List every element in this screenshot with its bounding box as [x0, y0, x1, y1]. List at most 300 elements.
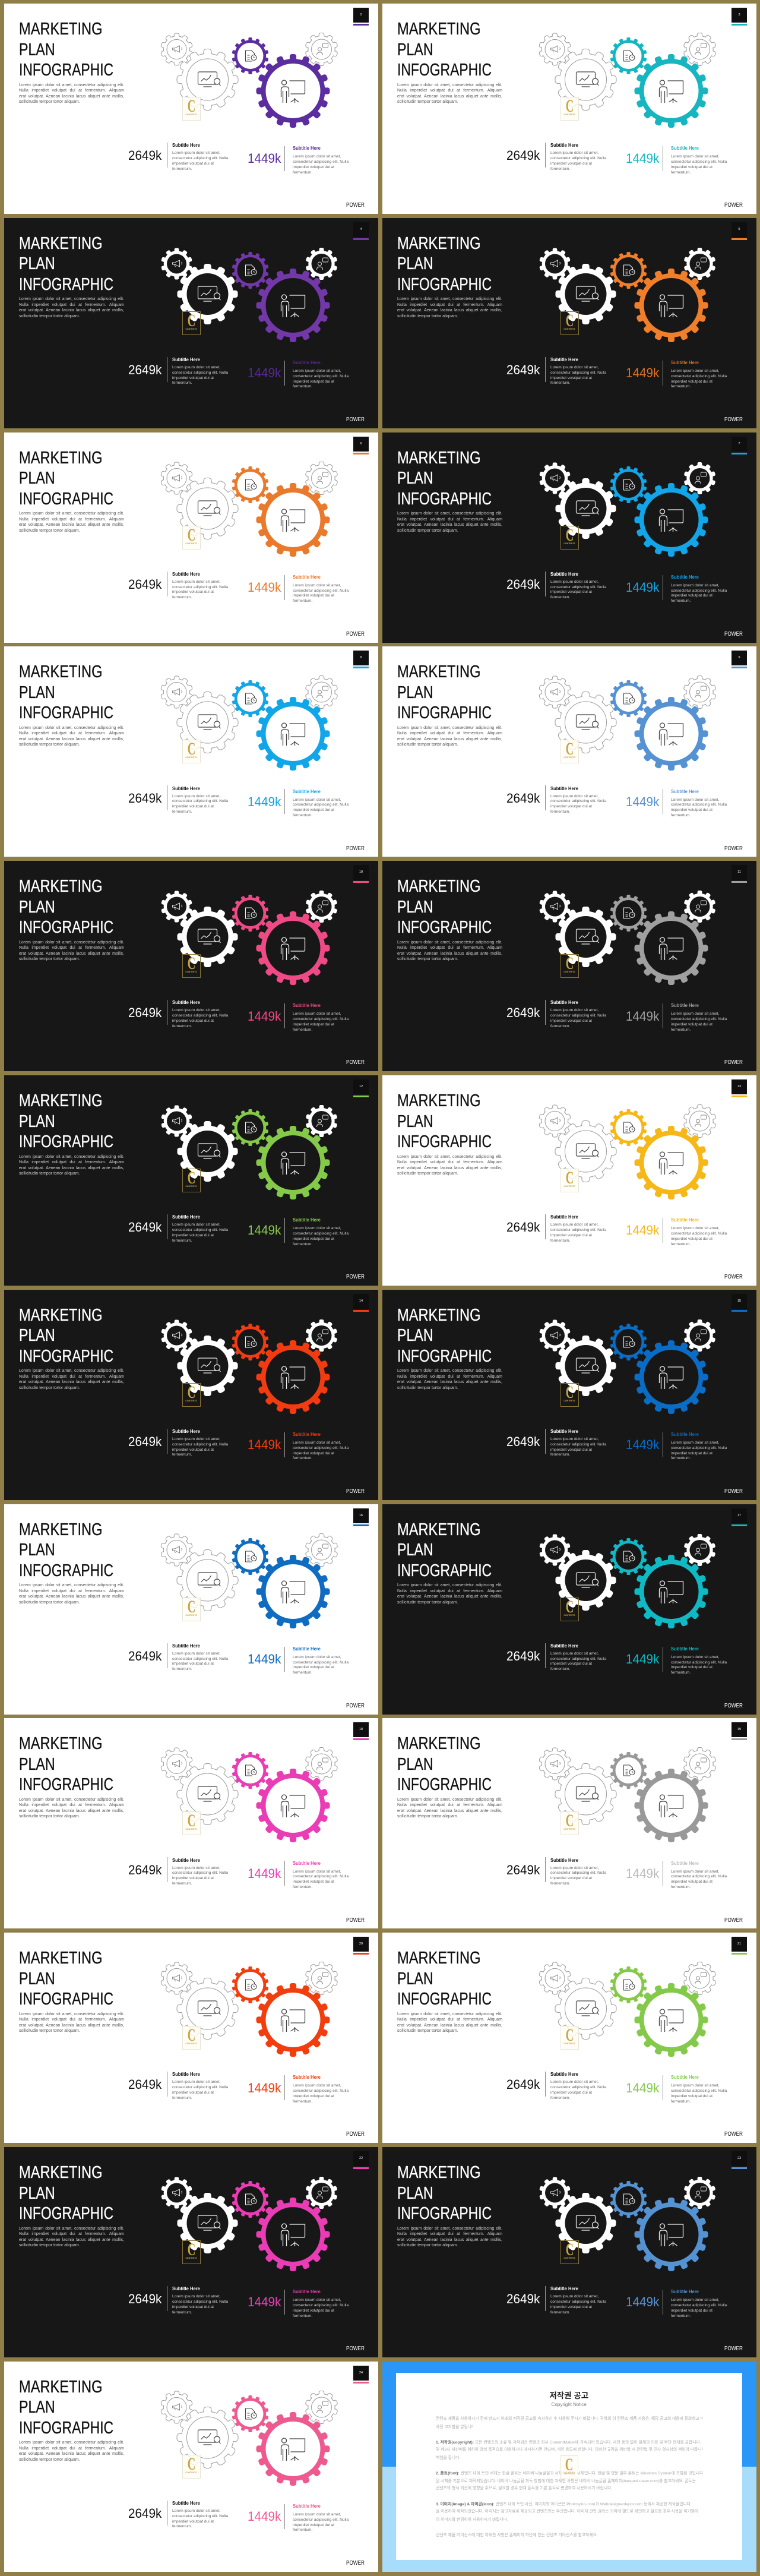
page number: 8 — [360, 656, 362, 659]
logo badge — [182, 1598, 201, 1621]
stat: 1449k: consectetur adipiscing elit. Nulla — [293, 160, 349, 164]
panel: slide 22 — [4, 2147, 378, 2357]
heading: INFOGRAPHIC — [19, 1990, 113, 2009]
stat: 2649k: Subtitle Here — [550, 572, 578, 577]
stat: 1449k: Subtitle Here — [293, 1003, 321, 1008]
stat: 2649k: Lorem ipsum dolor sit amet, — [550, 2294, 598, 2299]
heading: PLAN — [397, 469, 433, 488]
stat: 1449k: Lorem ipsum dolor sit amet, — [293, 583, 341, 588]
gear: chat — [305, 891, 337, 923]
brand: POWER — [724, 845, 743, 852]
body text: Lorem ipsum dolor sit amet, consectetur adipiscing elit. — [397, 940, 502, 945]
page number — [732, 8, 747, 26]
stat: 2649k: imperdiet volutpat dui at — [550, 2305, 592, 2309]
stat: 1449k: fermentum. — [671, 599, 691, 603]
stat: 1449k: Subtitle Here — [671, 789, 699, 794]
stat: 2649k: Lorem ipsum dolor sit amet, — [172, 580, 220, 584]
gears — [382, 1718, 756, 1928]
heading: MARKETING — [397, 20, 481, 39]
gear: document — [232, 1752, 268, 1789]
heading — [19, 1948, 114, 2010]
body text: sollicitudin tempor tortor aliquam. — [19, 743, 80, 747]
heading: INFOGRAPHIC — [19, 1775, 113, 1794]
heading — [397, 234, 492, 294]
stat: 1449k — [626, 360, 727, 389]
page number: 19 — [737, 1728, 741, 1731]
stat: 1449k: Lorem ipsum dolor sit amet, — [293, 798, 341, 802]
stat: 1449k: fermentum. — [671, 2314, 691, 2318]
stat: 2649k: imperdiet volutpat dui at — [172, 804, 214, 809]
stat: 1449k: imperdiet volutpat dui at — [293, 165, 334, 169]
stat: 2649k: Subtitle Here — [550, 1429, 578, 1434]
stat: 2649k: consectetur adipiscing elit. Nulla — [550, 2300, 606, 2304]
body text: Lorem ipsum dolor sit amet, consectetur adipiscing elit. — [19, 2227, 124, 2231]
panel: slide 16 — [4, 1504, 378, 1715]
body text: Nulla imperdiet volutpat dui at fermentum. Aliquam — [19, 89, 124, 93]
stat: 1449k: consectetur adipiscing elit. Nulla — [293, 1874, 349, 1879]
stat: 1449k: imperdiet volutpat dui at — [671, 1880, 712, 1884]
heading: MARKETING — [397, 1520, 481, 1539]
stat: 1449k: imperdiet volutpat dui at — [671, 1451, 712, 1456]
heading: INFOGRAPHIC — [397, 275, 492, 294]
logo badge: C — [565, 2455, 573, 2474]
heading: PLAN — [19, 1326, 55, 1345]
notice section 3 line 3: 이 이미지를 변경하여 사용하시기 바랍니다. — [436, 2518, 508, 2522]
heading — [19, 662, 113, 722]
body text: erat volutpat. Aenean lacinia lacus aliquet ante mollis, — [397, 952, 502, 956]
stat: 2649k — [128, 1429, 241, 1459]
gear: megaphone — [161, 1748, 192, 1780]
gear: document — [610, 1538, 647, 1575]
body text: Nulla imperdiet volutpat dui at fermentum. Aliquam — [397, 946, 502, 950]
stat: 1449k: consectetur adipiscing elit. Nulla — [671, 1232, 727, 1236]
stat: 2649k: Lorem ipsum dolor sit amet, — [550, 794, 598, 798]
heading: MARKETING — [19, 877, 103, 896]
heading: INFOGRAPHIC — [397, 1561, 492, 1580]
body text: sollicitudin tempor tortor aliquam. — [19, 1386, 80, 1390]
gear: document — [610, 1109, 647, 1146]
heading: INFOGRAPHIC — [397, 490, 492, 509]
body text — [19, 726, 124, 747]
notice section 3 line 1: 3. 이미지(image) & 아이콘(icon): 컨텐츠 내에 쓰인 사진, 이미지와 아이콘은 Photosplus.com과 Webdesignerdepot.com 등에서 제공한 저작물입니다. — [436, 2502, 692, 2506]
page number: 6 — [360, 442, 362, 446]
page number: 12 — [359, 1085, 363, 1088]
gear: megaphone — [161, 677, 192, 708]
gear: chat — [305, 1962, 337, 1994]
heading: INFOGRAPHIC — [19, 275, 113, 294]
gear: presenter — [256, 2198, 330, 2271]
stat: 2649k: consectetur adipiscing elit. Nulla — [550, 1014, 606, 1018]
stat: 2649k: fermentum. — [172, 2524, 192, 2528]
gears — [382, 1290, 756, 1500]
body text: sollicitudin tempor tortor aliquam. — [19, 1172, 80, 1176]
gear: megaphone — [161, 2177, 192, 2209]
logo badge: C — [565, 1168, 574, 1188]
body text: erat volutpat. Aenean lacinia lacus aliquet ante mollis, — [397, 2237, 502, 2242]
brand: POWER — [346, 2559, 365, 2566]
stat: 1449k: 1449k — [626, 1223, 659, 1238]
panel: slide 10 — [4, 861, 378, 1071]
heading — [397, 1948, 492, 2010]
stat: 2649k: 2649k — [506, 2077, 540, 2092]
stat: 1449k: Subtitle Here — [293, 2075, 321, 2080]
body text: Lorem ipsum dolor sit amet, consectetur adipiscing elit. — [397, 297, 502, 301]
stat: 2649k: Subtitle Here — [172, 572, 200, 577]
body text: Nulla imperdiet volutpat dui at fermentum. Aliquam — [19, 2018, 124, 2022]
stat: 2649k: Lorem ipsum dolor sit amet, — [172, 2294, 220, 2299]
stat: 2649k: fermentum. — [172, 1882, 192, 1886]
logo badge: C — [187, 2454, 195, 2474]
stat: 2649k: Subtitle Here — [550, 357, 578, 362]
gear: chat — [683, 891, 715, 923]
stat: 2649k: Subtitle Here — [550, 1214, 578, 1220]
body text — [397, 940, 502, 962]
page number — [732, 865, 747, 883]
stat: 1449k: fermentum. — [293, 2100, 312, 2104]
gear: document — [610, 680, 647, 717]
stat: 2649k: Subtitle Here — [550, 1000, 578, 1005]
stat: 1449k: imperdiet volutpat dui at — [293, 2523, 334, 2527]
stat: 2649k: imperdiet volutpat dui at — [172, 2091, 214, 2095]
stat: 2649k: 2649k — [506, 1220, 540, 1235]
heading — [397, 1520, 492, 1581]
heading: MARKETING — [19, 234, 103, 253]
stat: 2649k: imperdiet volutpat dui at — [550, 1876, 592, 1880]
gear: presenter — [634, 483, 708, 557]
body text: Lorem ipsum dolor sit amet, consectetur adipiscing elit. — [19, 1369, 124, 1373]
stat: 2649k: 2649k — [128, 2506, 162, 2521]
stat: 2649k — [506, 1643, 619, 1673]
stat: 1449k: Lorem ipsum dolor sit amet, — [293, 1012, 341, 1016]
stat: 1449k: 1449k — [248, 2509, 281, 2524]
gear: chat — [305, 1319, 337, 1352]
stat: 1449k — [626, 146, 727, 175]
stat: 1449k: imperdiet volutpat dui at — [293, 2309, 334, 2313]
page number: 5 — [738, 228, 740, 231]
stat: 1449k: imperdiet volutpat dui at — [293, 380, 334, 384]
body text — [397, 1797, 502, 1820]
gear: document — [232, 37, 268, 74]
heading: INFOGRAPHIC — [19, 61, 113, 80]
gear: presenter — [256, 54, 330, 128]
gears — [382, 2147, 756, 2357]
panel: slide 13 — [382, 1075, 756, 1286]
stat: 1449k: fermentum. — [671, 1456, 691, 1460]
gear: megaphone — [539, 891, 570, 923]
page number — [353, 1079, 369, 1097]
gear: presenter — [634, 1769, 708, 1842]
body text: Lorem ipsum dolor sit amet, consectetur adipiscing elit. — [397, 83, 502, 87]
stat: 2649k: Subtitle Here — [172, 1858, 200, 1863]
stat: 2649k — [506, 143, 607, 171]
panel: slide 14 — [4, 1290, 378, 1500]
gears — [382, 861, 756, 1071]
body text: erat volutpat. Aenean lacinia lacus aliquet ante mollis, — [397, 1809, 502, 1813]
stat: 2649k: Lorem ipsum dolor sit amet, — [550, 1437, 598, 1441]
stat: 2649k: Lorem ipsum dolor sit amet, — [550, 1866, 598, 1870]
page number: 9 — [738, 656, 740, 659]
panel: slide 23 — [382, 2147, 756, 2357]
logo badge: C — [187, 2025, 195, 2045]
body text: Nulla imperdiet volutpat dui at fermentum. Aliquam — [397, 89, 502, 93]
body text — [397, 83, 502, 104]
stat: 1449k: Lorem ipsum dolor sit amet, — [671, 1012, 719, 1016]
body text: Lorem ipsum dolor sit amet, consectetur adipiscing elit. — [397, 1798, 502, 1802]
page number: 21 — [737, 1942, 741, 1946]
body text: Nulla imperdiet volutpat dui at fermentum. Aliquam — [397, 1375, 502, 1379]
gear: chart — [555, 692, 616, 753]
stat: 2649k: consectetur adipiscing elit. Nulla — [172, 1657, 228, 1661]
stat: 1449k: consectetur adipiscing elit. Nulla — [293, 1017, 349, 1021]
gears — [4, 2147, 378, 2357]
stat: 1449k: fermentum. — [671, 813, 691, 817]
heading: INFOGRAPHIC — [397, 703, 492, 722]
stat: 1449k: 1449k — [248, 1866, 281, 1881]
logo badge — [182, 1383, 201, 1407]
body text: Lorem ipsum dolor sit amet, consectetur adipiscing elit. — [19, 2012, 124, 2016]
heading: PLAN — [19, 40, 55, 59]
body text: Nulla imperdiet volutpat dui at fermentum. Aliquam — [19, 517, 124, 522]
body text: sollicitudin tempor tortor aliquam. — [19, 100, 80, 104]
body text: Lorem ipsum dolor sit amet, consectetur adipiscing elit. — [19, 1583, 124, 1587]
gear: document — [232, 1324, 268, 1360]
stat: 2649k: fermentum. — [550, 2310, 570, 2315]
stat: 2649k: imperdiet volutpat dui at — [550, 590, 592, 594]
body text: Lorem ipsum dolor sit amet, consectetur adipiscing elit. — [19, 940, 124, 945]
stat: 1449k: imperdiet volutpat dui at — [671, 1022, 712, 1027]
body text: sollicitudin tempor tortor aliquam. — [397, 2243, 458, 2247]
logo badge — [560, 1169, 578, 1192]
stat: 2649k: Subtitle Here — [172, 1000, 200, 1005]
gear: chat — [683, 1105, 715, 1137]
stat: 1449k: fermentum. — [293, 813, 312, 817]
stat: 1449k: 1449k — [248, 1223, 281, 1238]
page number: 11 — [737, 870, 741, 874]
page number: 14 — [359, 1299, 363, 1303]
stat: 1449k — [626, 1647, 739, 1677]
brand: POWER — [724, 416, 743, 423]
stat: 2649k: consectetur adipiscing elit. Nulla — [172, 2085, 228, 2089]
body text: erat volutpat. Aenean lacinia lacus aliquet ante mollis, — [397, 308, 502, 312]
body text — [19, 1368, 124, 1391]
stat: 1449k: Lorem ipsum dolor sit amet, — [293, 369, 341, 373]
logo badge: C — [565, 954, 574, 973]
stat: 1449k: 1449k — [626, 1866, 659, 1881]
stat: 2649k: consectetur adipiscing elit. Nulla — [172, 2300, 228, 2304]
stat: 2649k: Subtitle Here — [172, 2072, 200, 2077]
gear: megaphone — [539, 1319, 570, 1351]
logo badge: CONTENTS — [563, 1400, 575, 1402]
stat: 2649k — [506, 1429, 619, 1459]
stat: 2649k: fermentum. — [172, 2310, 192, 2315]
gear: document — [232, 1538, 268, 1575]
page number: 16 — [359, 1514, 363, 1517]
gear: chart — [555, 1978, 616, 2039]
stat: 1449k: fermentum. — [293, 1242, 312, 1246]
stat: 1449k: 1449k — [626, 365, 659, 380]
body text — [397, 1154, 502, 1176]
gear: chart — [555, 1121, 616, 1182]
gear: document — [610, 37, 647, 74]
heading: PLAN — [397, 2184, 433, 2203]
page number — [353, 228, 369, 240]
stat: 1449k: consectetur adipiscing elit. Nulla — [293, 803, 349, 807]
stat: 2649k: Lorem ipsum dolor sit amet, — [172, 365, 220, 370]
gear: presenter — [634, 1983, 708, 2057]
panel: slide 21 — [382, 1933, 756, 2143]
body text: erat volutpat. Aenean lacinia lacus aliquet ante mollis, — [19, 952, 124, 956]
gears — [382, 1504, 756, 1715]
stat: 2649k: Subtitle Here — [172, 2501, 200, 2506]
stat: 1449k: imperdiet volutpat dui at — [293, 1451, 334, 1456]
stat: 2649k: 2649k — [506, 148, 540, 163]
gear: megaphone — [539, 2177, 570, 2209]
gear: chat — [683, 2177, 715, 2209]
stat: 2649k: fermentum. — [550, 2096, 570, 2100]
stat: 1449k: Subtitle Here — [671, 1432, 699, 1437]
heading: INFOGRAPHIC — [19, 490, 113, 509]
stat: 2649k: 2649k — [506, 1649, 540, 1663]
panel: slide 12 — [4, 1075, 378, 1286]
gears — [160, 33, 338, 128]
body text: erat volutpat. Aenean lacinia lacus aliquet ante mollis, — [397, 1595, 502, 1599]
page number: 15 — [737, 1299, 741, 1303]
page number — [732, 1937, 747, 1955]
body text: erat volutpat. Aenean lacinia lacus aliquet ante mollis, — [19, 1809, 124, 1813]
gear: presenter — [256, 911, 330, 985]
stat: 1449k: 1449k — [626, 2081, 659, 2095]
stat: 1449k: Lorem ipsum dolor sit amet, — [671, 369, 719, 373]
brand: POWER — [346, 2345, 365, 2352]
body text: Nulla imperdiet volutpat dui at fermentum. Aliquam — [397, 2018, 502, 2022]
stat: 2649k: 2649k — [506, 1434, 540, 1449]
stat: 1449k: consectetur adipiscing elit. Nulla — [293, 1660, 349, 1665]
stat: 2649k: consectetur adipiscing elit. Nulla — [172, 1442, 228, 1447]
page number: 24 — [359, 2371, 363, 2375]
stat: 2649k: Lorem ipsum dolor sit amet, — [550, 151, 598, 155]
stat: 2649k: 2649k — [128, 1220, 162, 1235]
stat: 1449k: 1449k — [626, 151, 659, 166]
stat: 1449k: consectetur adipiscing elit. Nulla — [671, 803, 727, 807]
gear: chart — [555, 264, 616, 324]
body text: sollicitudin tempor tortor aliquam. — [19, 2243, 80, 2247]
stat: 1449k: consectetur adipiscing elit. Nulla — [293, 589, 349, 593]
stat: 2649k: imperdiet volutpat dui at — [172, 1233, 214, 1238]
stat: 1449k: 1449k — [626, 794, 659, 809]
body text: Nulla imperdiet volutpat dui at fermentum. Aliquam — [19, 303, 124, 307]
gear: chart — [177, 1764, 238, 1824]
logo badge — [560, 1383, 578, 1407]
gear: chart — [555, 478, 616, 539]
stat: 1449k: 1449k — [626, 2294, 659, 2309]
logo badge: CONTENTS — [563, 2257, 575, 2259]
stat: 1449k: imperdiet volutpat dui at — [671, 2309, 712, 2313]
stat: 2649k — [128, 357, 228, 385]
stat: 2649k: imperdiet volutpat dui at — [550, 376, 592, 380]
stat: 2649k: imperdiet volutpat dui at — [172, 162, 214, 166]
body text: erat volutpat. Aenean lacinia lacus aliquet ante mollis, — [397, 737, 502, 741]
gear: megaphone — [161, 1534, 192, 1565]
stat: 1449k: consectetur adipiscing elit. Nulla — [293, 1446, 349, 1450]
body text — [19, 2226, 124, 2248]
page number — [732, 1722, 747, 1740]
stat: 1449k: Lorem ipsum dolor sit amet, — [293, 1870, 341, 1874]
logo badge — [560, 954, 578, 978]
stat: 2649k: fermentum. — [172, 1024, 192, 1028]
body text: Nulla imperdiet volutpat dui at fermentum. Aliquam — [19, 1160, 124, 1164]
stat: 1449k: fermentum. — [293, 1028, 312, 1032]
stat: 2649k: fermentum. — [172, 2096, 192, 2100]
stat: 2649k: fermentum. — [172, 1667, 192, 1671]
body text — [19, 940, 124, 962]
gear: megaphone — [539, 677, 570, 708]
gear: chat — [305, 1105, 337, 1137]
gear: document — [232, 1109, 268, 1146]
stat: 1449k: imperdiet volutpat dui at — [293, 2094, 334, 2098]
stat: 1449k: Lorem ipsum dolor sit amet, — [293, 1441, 341, 1445]
stat: 1449k: Lorem ipsum dolor sit amet, — [671, 583, 719, 588]
logo badge — [560, 2026, 578, 2050]
page number: 2 — [360, 13, 362, 17]
heading — [19, 2377, 114, 2439]
logo badge: C — [565, 2025, 574, 2045]
stat: 2649k: 2649k — [506, 1005, 540, 1020]
stat: 2649k: consectetur adipiscing elit. Nulla — [550, 1228, 606, 1232]
stat: 2649k: fermentum. — [172, 595, 192, 599]
body text: erat volutpat. Aenean lacinia lacus aliquet ante mollis, — [19, 737, 124, 741]
logo badge: C — [565, 2240, 574, 2259]
stat: 2649k: imperdiet volutpat dui at — [550, 1233, 592, 1238]
stat: 2649k: Subtitle Here — [172, 1643, 200, 1649]
stat: 1449k: imperdiet volutpat dui at — [293, 1880, 334, 1884]
stat: 1449k: Lorem ipsum dolor sit amet, — [671, 1226, 719, 1230]
stat: 2649k: consectetur adipiscing elit. Nulla — [550, 799, 606, 803]
page number — [353, 1508, 369, 1526]
page number — [353, 651, 369, 668]
stat: 2649k: fermentum. — [550, 1024, 570, 1028]
stat: 2649k: fermentum. — [550, 381, 570, 385]
body text: erat volutpat. Aenean lacinia lacus aliquet ante mollis, — [19, 1595, 124, 1599]
stat: 2649k: imperdiet volutpat dui at — [550, 1448, 592, 1452]
panel: slide 4 — [4, 218, 378, 428]
stat: 1449k: Lorem ipsum dolor sit amet, — [671, 2298, 719, 2302]
gear: presenter — [634, 1555, 708, 1628]
heading: PLAN — [397, 254, 433, 273]
stat: 1449k: consectetur adipiscing elit. Nulla — [671, 160, 727, 164]
logo badge — [182, 2455, 201, 2479]
stat: 2649k: imperdiet volutpat dui at — [550, 162, 592, 166]
heading — [397, 20, 492, 80]
stat: 1449k: fermentum. — [671, 1671, 691, 1675]
gear: chat — [683, 248, 715, 280]
stat: 1449k: Lorem ipsum dolor sit amet, — [293, 154, 341, 159]
notice section 2 line 2: 된 서체를 기본으로 제작되었습니다. 네이버 나눔글꼴 취득 방법에 대한 자세한 사항은 네이버 나눔글꼴 홈페이지(hangeul.naver.com)를 참고하세요. 폰트는 — [436, 2479, 696, 2483]
stat: 1449k: imperdiet volutpat dui at — [293, 1665, 334, 1669]
stat: 1449k: Subtitle Here — [293, 1646, 321, 1652]
stat: 2649k: Subtitle Here — [550, 1643, 578, 1649]
gear: megaphone — [161, 33, 192, 65]
body text: Nulla imperdiet volutpat dui at fermentum. Aliquam — [397, 2232, 502, 2236]
stat: 2649k: imperdiet volutpat dui at — [550, 2091, 592, 2095]
gears — [162, 248, 337, 342]
stat: 2649k: consectetur adipiscing elit. Nulla — [172, 1871, 228, 1875]
logo badge: C — [565, 1597, 574, 1617]
gear: document — [232, 680, 268, 717]
gear: chat — [683, 1534, 715, 1566]
stat: 1449k: Subtitle Here — [293, 574, 321, 580]
stat: 2649k — [128, 2286, 241, 2316]
body text — [397, 1368, 502, 1391]
